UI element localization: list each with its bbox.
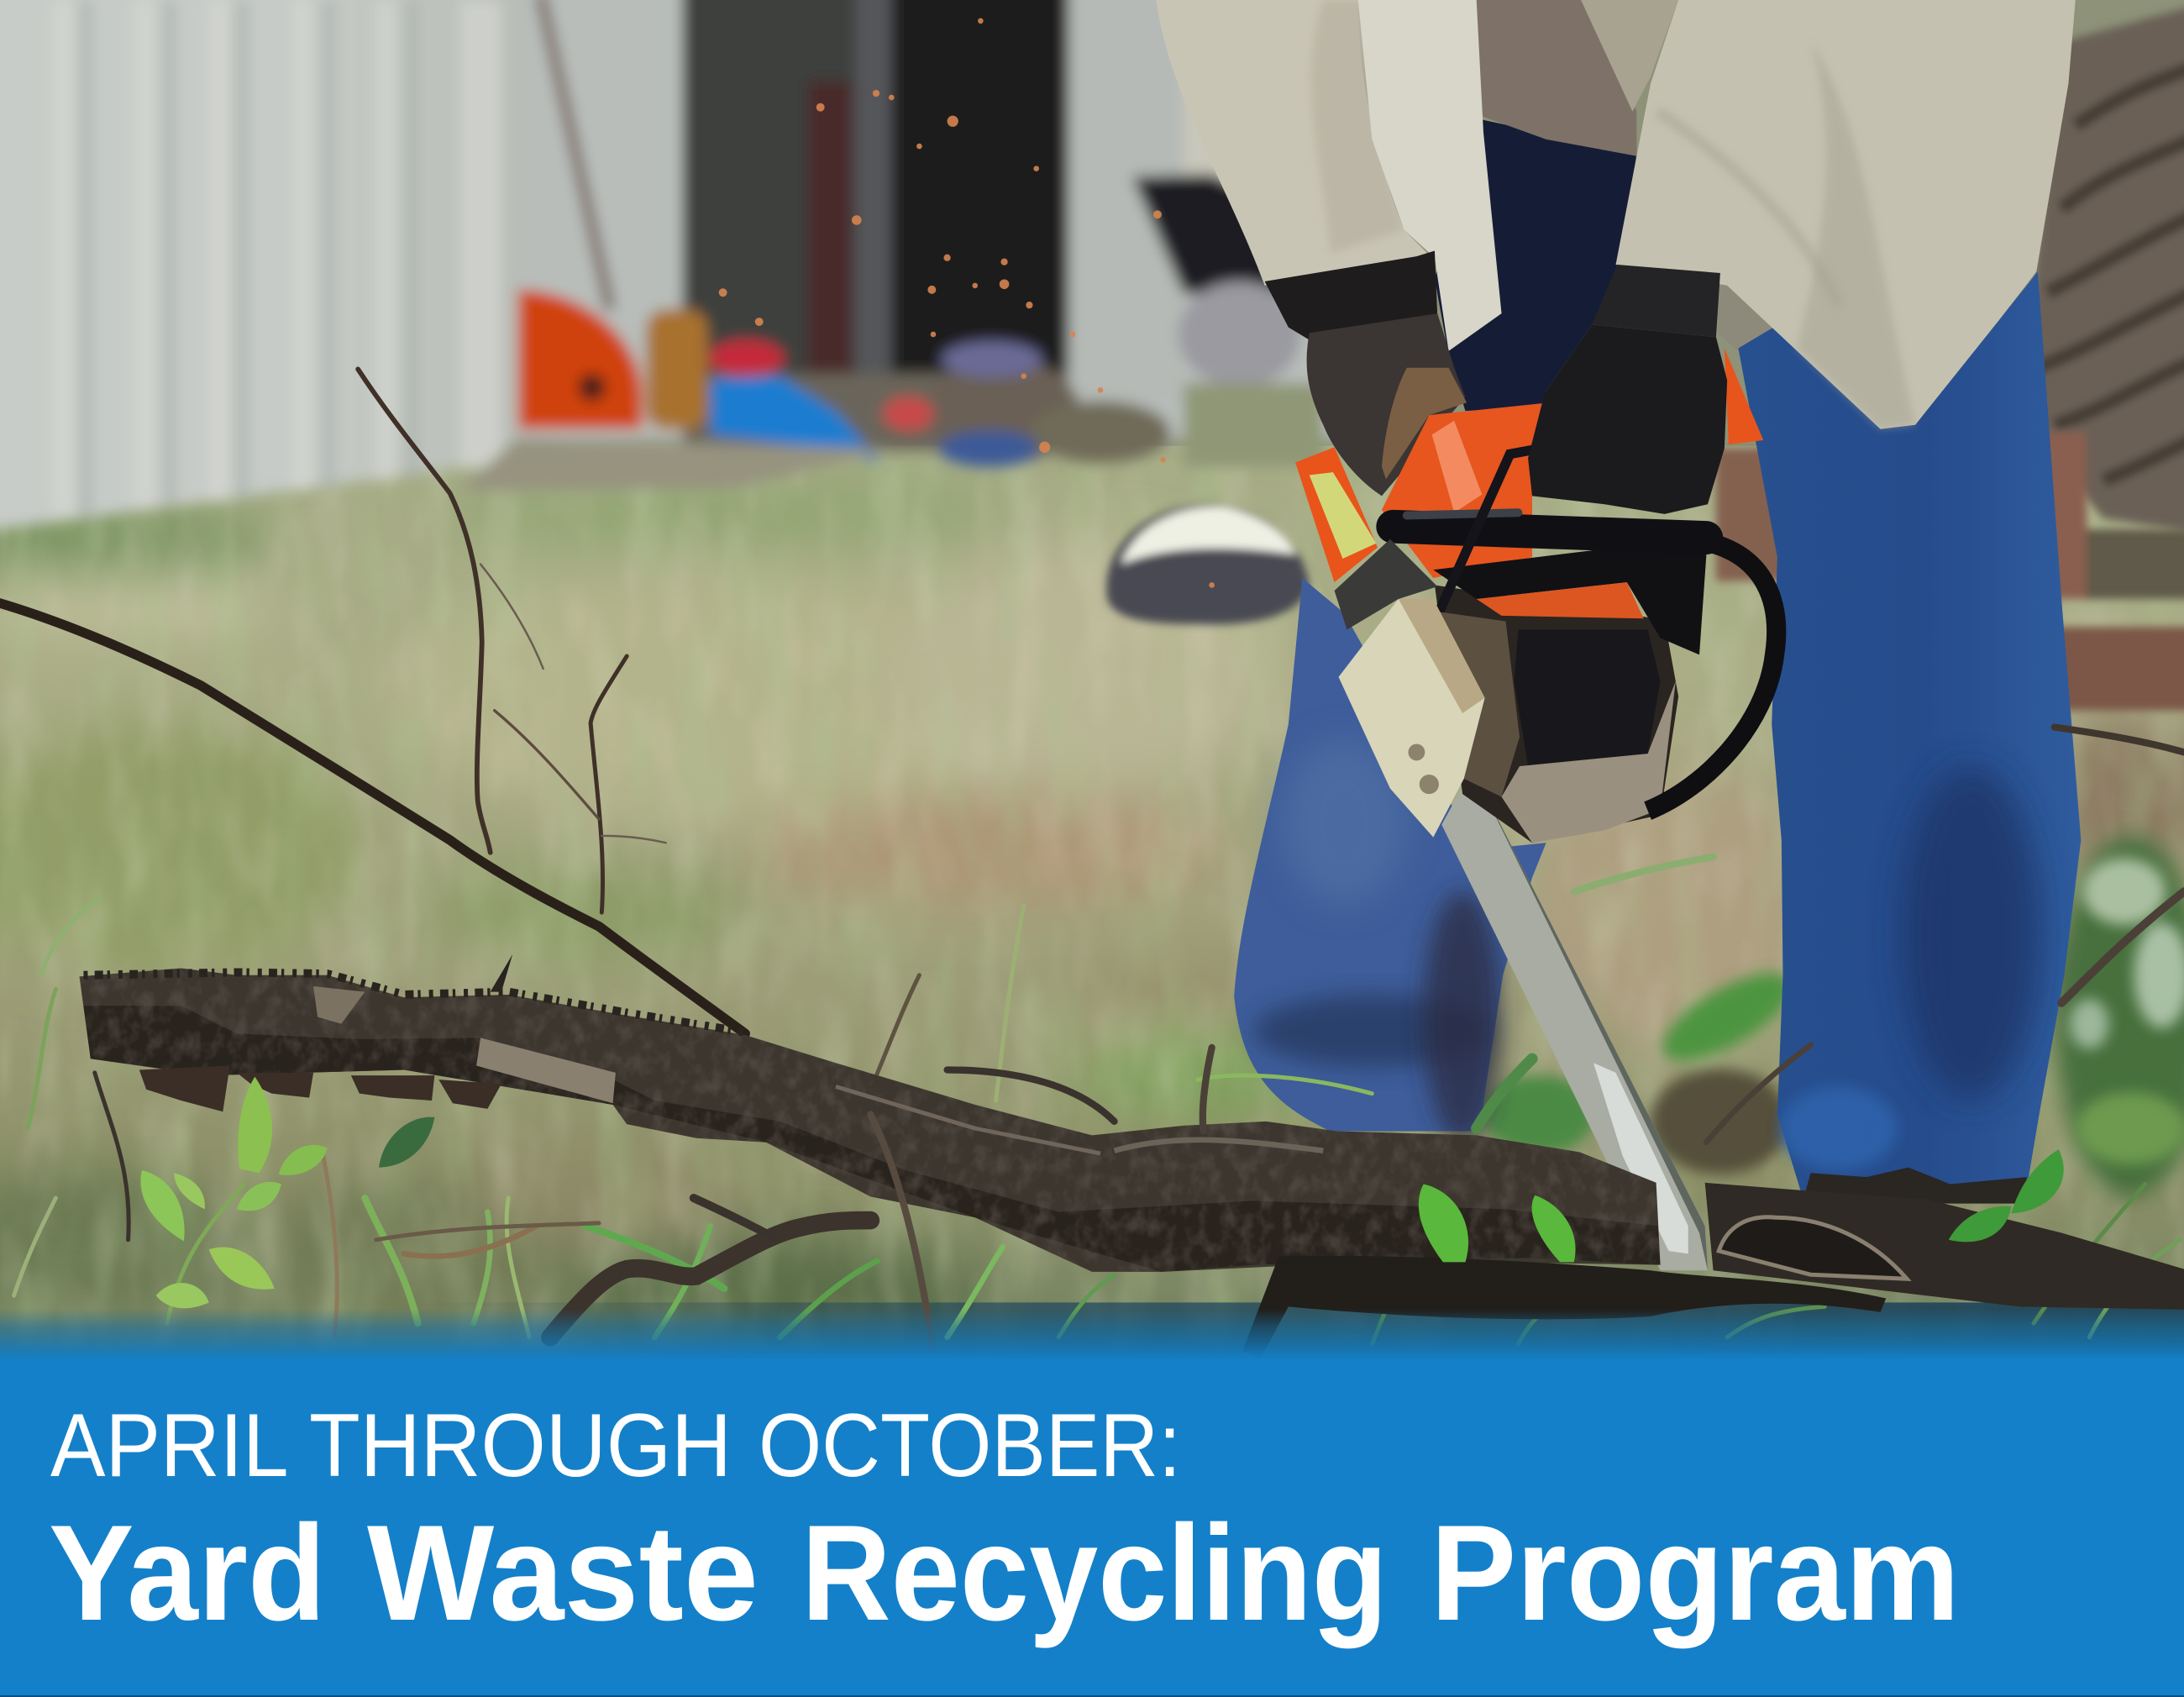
concrete step (459, 438, 891, 491)
bar cover (1339, 599, 1485, 838)
white rock (1106, 504, 1310, 624)
heap of debris (927, 358, 1079, 464)
left orange plate (1295, 447, 1378, 582)
jagged bark top (83, 972, 745, 1032)
banner subtitle: OCTOBER: (759, 1395, 1181, 1495)
engine (1514, 630, 1661, 766)
banner title: Recycling (801, 1497, 1388, 1649)
banner subtitle: APRIL (50, 1395, 286, 1495)
blue fade at photo bottom (0, 1309, 2184, 1361)
red and blue tarp (709, 340, 785, 376)
grass blades and weeds (14, 857, 2180, 1344)
shirt front panel (1358, 0, 1502, 351)
clutch area (1437, 612, 1520, 796)
right jeans leg (1716, 271, 2081, 1204)
banner subtitle: THROUGH (309, 1395, 732, 1495)
right wall (1068, 0, 1184, 404)
title banner (0, 1359, 2184, 1697)
chainsaw body backing (1435, 585, 1678, 843)
left jeans leg (1234, 578, 1546, 1143)
yard ground (0, 446, 2184, 1365)
distant backdrop (0, 0, 2184, 557)
right glove (1528, 265, 1727, 514)
right sleeve and tail (1616, 0, 2076, 429)
lower branches (95, 728, 2184, 1358)
thin branch with twigs (0, 369, 745, 1033)
orange bags (518, 290, 642, 429)
orange top housing (1382, 402, 1549, 578)
right foliage (2055, 836, 2184, 1198)
left glove (1265, 250, 1467, 496)
front hand guard (1437, 450, 1532, 616)
chainsaw (1295, 349, 1777, 1270)
left sleeve (1156, 0, 1432, 286)
stacked bricks (1716, 432, 2184, 711)
shirt (1156, 0, 2076, 429)
hanging bark (139, 1066, 501, 1111)
guide bar (1441, 769, 1708, 1270)
lower orange housing (1477, 582, 1644, 618)
banner title: Waste (367, 1497, 759, 1649)
top handle (1393, 527, 1706, 538)
dark doorway (683, 0, 864, 383)
navy undershirt and far leg (1435, 118, 1636, 411)
rear orange (1725, 349, 1763, 444)
person (1156, 0, 2081, 1204)
tree trunk at right (2019, 0, 2184, 536)
banner title: Program (1431, 1497, 1960, 1649)
green leaves (140, 1077, 2064, 1308)
doorway backing wall (518, 0, 1354, 439)
rear loop handle (1648, 544, 1777, 811)
shed wall (0, 0, 518, 532)
banner title: Yard (49, 1497, 326, 1649)
dark shadow under photo bottom (417, 1302, 2184, 1361)
sawdust particles (719, 18, 1215, 588)
cut log continuation (1705, 1183, 2184, 1310)
bark texture (80, 968, 1661, 1274)
lower housing (1502, 681, 1676, 843)
blurred background: shed, doorway and stored items (0, 0, 1365, 532)
peeled bark patches (476, 1038, 616, 1103)
black mass below handle (1433, 536, 1708, 654)
log being cut (80, 954, 1661, 1274)
grey-brown t-shirt (1477, 0, 1636, 156)
